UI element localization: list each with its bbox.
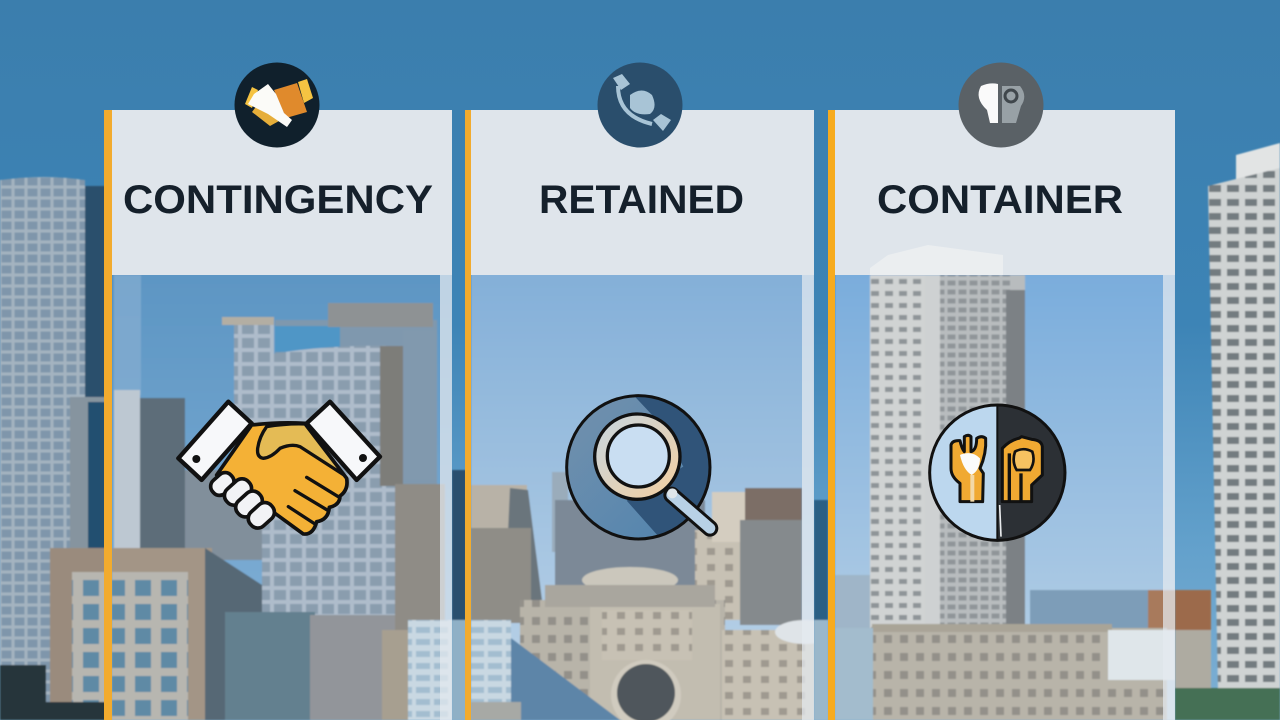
icon: split circle tools and fist: [930, 405, 1065, 540]
icon: badge profile: [958, 62, 1044, 148]
panel scene: retained skyline: [471, 270, 835, 720]
accent bar: [465, 110, 471, 720]
heading: CONTAINER: [877, 178, 1123, 222]
icon: magnifying glass: [567, 395, 713, 540]
panel header: retained: [471, 110, 814, 275]
icon: badge care: [598, 62, 682, 148]
panel header: container: [835, 110, 1175, 275]
heading: RETAINED: [539, 178, 744, 222]
panel scene: contingency skyline: [112, 270, 452, 720]
accent bar: [104, 110, 112, 720]
panel: contingency: [104, 62, 452, 720]
panel header: contingency: [112, 110, 452, 275]
icon: handshake: [178, 402, 380, 534]
faded tower roof: [870, 245, 1003, 275]
icon: badge handshake: [234, 62, 320, 148]
accent bar: [828, 110, 835, 720]
panel scene: container skyline: [835, 270, 1178, 720]
panel: container: [828, 62, 1178, 720]
heading: CONTINGENCY: [123, 178, 433, 222]
panel: retained: [465, 62, 835, 720]
